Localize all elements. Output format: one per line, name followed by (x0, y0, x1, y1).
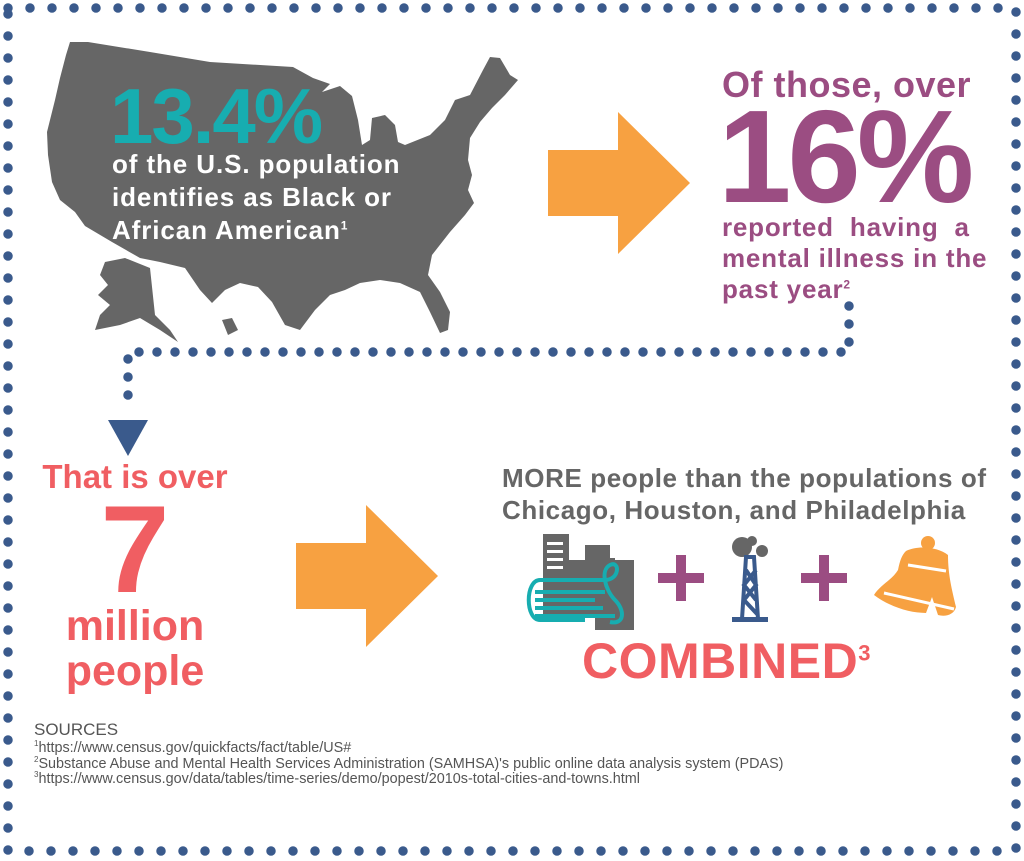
arrow: orange right 1 (548, 112, 690, 254)
icon: Liberty Bell (874, 536, 956, 616)
comparison heading (502, 463, 987, 525)
icon: plus 2 (801, 555, 847, 601)
big number 7: 7 (101, 481, 169, 619)
sources: SOURCES (34, 720, 118, 739)
sources: 2Substance Abuse and Mental Health Services Administration (SAMHSA)'s public online data analysis system (PDAS) (34, 755, 783, 772)
caption (722, 212, 987, 304)
map of US (47, 42, 518, 342)
caption: past year2 (722, 274, 851, 304)
caption (112, 149, 400, 245)
big number 13.4%: 13.4% (110, 72, 321, 160)
sources (34, 720, 783, 787)
caption: million (66, 602, 204, 650)
caption (66, 602, 204, 695)
heading: Of those, over (722, 64, 971, 105)
stat: 7 million (42, 458, 228, 695)
caption: people (66, 647, 204, 695)
heading: That is over (42, 458, 228, 495)
comparison heading: Chicago, Houston, and Philadelphia (502, 495, 966, 525)
comparison heading: MORE people than the populations of (502, 463, 987, 493)
sources: 3https://www.census.gov/data/tables/time-series/demo/popest/2010s-total-cities-and-towns.html (34, 770, 640, 787)
arrow: orange right 2 (296, 505, 438, 647)
caption: identifies as Black or (112, 182, 392, 212)
big number 16%: 16% (718, 83, 970, 230)
stat: 16% (718, 64, 987, 304)
caption: reported having a (722, 212, 970, 242)
dotted connector with arrowhead (108, 301, 854, 456)
caption: of the U.S. population (112, 149, 400, 179)
icon: Houston oil derrick (732, 536, 768, 622)
caption: African American1 (112, 215, 348, 245)
sources: 1https://www.census.gov/quickfacts/fact/table/US# (34, 739, 351, 756)
stat: 13.4% (110, 72, 400, 245)
icon: Chicago buildings (526, 534, 634, 630)
caption: mental illness in the (722, 243, 987, 273)
icon: plus 1 (658, 555, 704, 601)
combined label: COMBINED3 (582, 633, 871, 689)
